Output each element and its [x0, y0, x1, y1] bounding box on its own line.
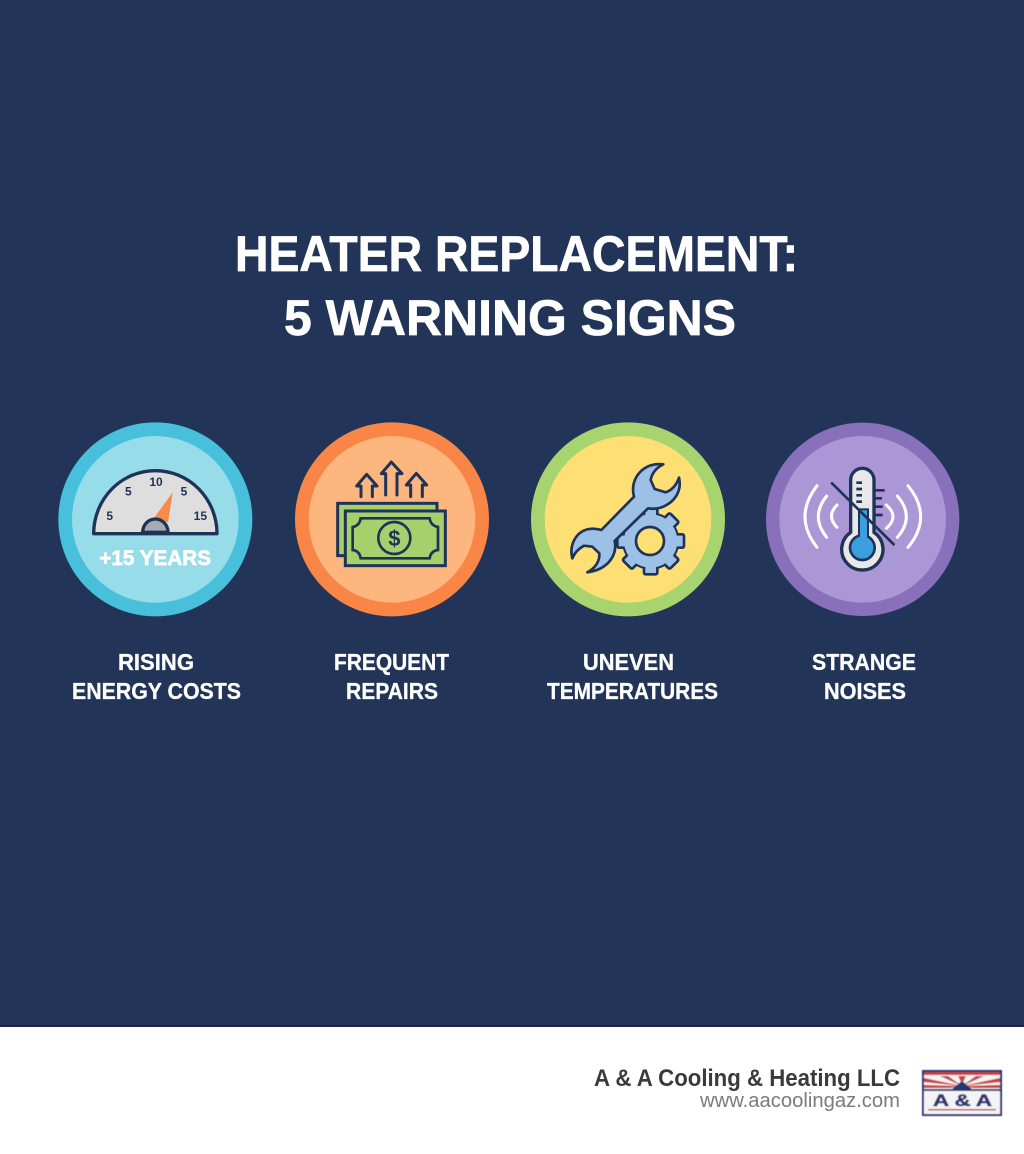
title: 5 WARNING SIGNS	[284, 290, 736, 346]
logo	[923, 1071, 1001, 1115]
label: strange noises: STRANGE	[812, 649, 916, 675]
label: frequent repairs: REPAIRS	[346, 678, 438, 704]
label: strange noises	[812, 649, 916, 704]
logo band	[924, 1089, 1000, 1091]
slash	[832, 483, 894, 544]
banknotes	[338, 503, 437, 556]
label: rising energy costs	[72, 649, 241, 704]
gauge hub	[143, 519, 168, 532]
icon: thermometer and noise badge	[766, 423, 959, 616]
gauge needle	[153, 492, 173, 522]
gear	[617, 508, 684, 574]
label: rising energy costs: RISING	[118, 649, 194, 675]
thermometer body	[842, 468, 883, 570]
logo letters: A & A	[933, 1091, 992, 1110]
label: frequent repairs	[334, 649, 449, 704]
label: strange noises: NOISES	[824, 678, 906, 704]
sound waves	[805, 486, 921, 547]
logo house	[951, 1081, 973, 1090]
rising arrows	[357, 462, 427, 497]
labels	[72, 649, 916, 704]
thermometer ticks	[856, 483, 862, 502]
title: HEATER REPLACEMENT:	[235, 226, 798, 282]
footer panel	[0, 1027, 1024, 1154]
thermometer scale	[875, 490, 885, 515]
label: uneven temperatures: TEMPERATURES	[547, 678, 718, 704]
gauge numbers: 10	[149, 475, 163, 489]
label: rising energy costs: ENERGY COSTS	[72, 678, 241, 704]
label: uneven temperatures: UNEVEN	[583, 649, 674, 675]
years label: +15 YEARS	[99, 546, 211, 570]
icon: money badge	[295, 422, 489, 616]
thermometer mercury	[859, 509, 868, 539]
logo sun rays	[924, 1072, 1000, 1088]
website: www.aacoolingaz.com	[699, 1090, 900, 1112]
label: frequent repairs: FREQUENT	[334, 649, 449, 675]
gauge numbers: 15	[194, 509, 207, 523]
footer divider	[0, 1025, 1024, 1027]
icon: money badge: $	[388, 526, 400, 551]
wrench	[571, 464, 680, 572]
logo strapline	[928, 1109, 996, 1110]
label: uneven temperatures	[547, 649, 718, 704]
icon: wrench and gear badge	[531, 422, 725, 616]
gauge numbers	[106, 475, 207, 523]
dollar coin	[378, 522, 410, 554]
gauge dial	[94, 471, 217, 534]
icon: gauge badge	[58, 422, 252, 616]
gauge numbers: 5	[106, 509, 113, 523]
gauge numbers: 5	[181, 484, 188, 498]
title	[235, 226, 798, 346]
company name: A & A Cooling & Heating LLC	[594, 1065, 900, 1092]
gauge numbers: 5	[125, 484, 132, 498]
